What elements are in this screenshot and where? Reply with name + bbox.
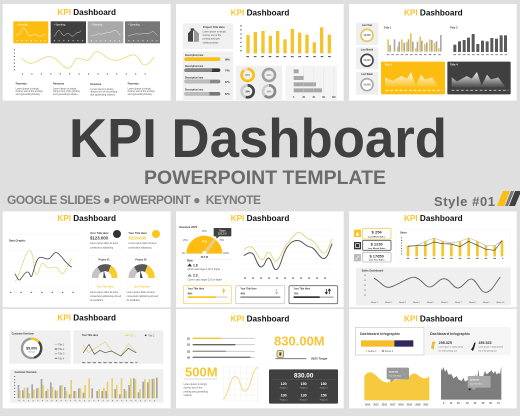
slide title: KPI Dashboard (57, 313, 116, 323)
grey area chart: 70 (497, 403, 500, 405)
slide: sparkline overview (3, 4, 171, 101)
sales dashboard panel: Week 4 (413, 302, 421, 304)
yellow area chart: 2015 (373, 404, 379, 406)
project card: setting industry. (203, 41, 219, 44)
line chart (14, 49, 154, 74)
secondary value: printing and typesetting (184, 390, 208, 393)
revenue gauge: 0% (182, 253, 185, 255)
dark values panel: 150 (301, 382, 307, 386)
sales tiles: $ 254 (372, 230, 382, 235)
yellow area chart: $4,500.000 (389, 370, 398, 373)
bar chart (241, 25, 331, 57)
progress panel: Description here (185, 76, 204, 79)
grey area chart: Your Title Here (470, 383, 482, 386)
gauge card: project 01: Project 01 (98, 258, 110, 261)
sales dashboard panel: Week 6 (441, 302, 449, 304)
project card: Project Title Here (203, 25, 225, 29)
period cards: 10,000 (363, 84, 371, 86)
progress panel: Description here (185, 54, 204, 57)
dark values panel: Product 5 (300, 398, 308, 401)
revenue gauge: Revenue 2025 (179, 225, 198, 229)
progress lines: Q1 (187, 338, 191, 340)
panel: title 4 (447, 62, 511, 94)
donut panel: 36% (267, 91, 271, 93)
gauge card: project 02: Your Title Here (133, 285, 151, 288)
main heading: KPI Dashboard (69, 107, 447, 169)
donut panel (236, 66, 282, 100)
status card: down (236, 286, 285, 304)
secondary value: industry. (184, 394, 193, 397)
sales tiles: $ 17650 (369, 253, 385, 258)
dark values panel: 830.00 (294, 372, 314, 379)
revenue text blocks: Revenue (16, 81, 27, 85)
slide title: KPI Dashboard (404, 314, 463, 324)
gauge card: project 01: Lorem ipsum dolor sit amet (90, 291, 118, 294)
sales dashboard panel: Week 5 (427, 302, 435, 304)
revenue text blocks: Revenue (128, 81, 139, 85)
sales dashboard panel: Week 1 (371, 302, 378, 304)
gauge card: project 01: Your Title Here (97, 285, 114, 288)
stats panel: 159.523 (478, 341, 492, 345)
status card: both: 70% (294, 293, 299, 295)
gauge card: project 01 (88, 255, 122, 303)
icon: style stripes (497, 191, 520, 206)
yellow area chart: 2014 (365, 403, 371, 406)
revenue text blocks: dummy text of the printing (90, 91, 118, 94)
revenue gauge: 75% (219, 240, 224, 242)
dark values panel: Product 6 (320, 398, 328, 401)
ratio block: Ratio (187, 259, 193, 262)
ratio block: 1.8 (193, 263, 198, 267)
progress lines: Q3 (187, 351, 191, 353)
period cards: 10,000 (363, 60, 371, 62)
sales tiles: Last Month Sales (368, 247, 386, 250)
status card: both: Your Title Here (294, 288, 311, 291)
grey area chart (441, 366, 502, 405)
project card: dummy text of the (203, 34, 222, 37)
project card: printing and type (203, 38, 221, 41)
subheading: POWERPOINT TEMPLATE (144, 168, 386, 189)
gauge card: project 02: consectetur adipiscing elit sed (127, 295, 158, 298)
gauge card: project 01: consectetur adipiscing elit sed (90, 295, 122, 298)
gauge card: project 02: Lorem ipsum dolor sit amet (127, 291, 155, 294)
slide: project progress (176, 4, 344, 101)
revenue gauge: 25% (183, 240, 188, 242)
horizontal bars: 0 (293, 97, 295, 99)
secondary value: dummy text of the (184, 387, 203, 390)
progress panel: 67% (225, 94, 231, 96)
dark values panel: Product 2 (300, 387, 308, 390)
line chart panel: Your Title Here (82, 334, 99, 337)
stacked bar card: Dashboard Infographic (360, 332, 400, 336)
progress panel: Description here (185, 65, 204, 68)
period cards: Last Week (361, 73, 373, 76)
progress panel: 98% (225, 60, 231, 62)
customer overview donut panel: Title 2 (58, 348, 65, 351)
chart: title 2 (450, 25, 507, 55)
line chart panel (73, 330, 163, 364)
slide title: KPI Dashboard (231, 314, 289, 324)
stacked bar card: Series 2 (385, 350, 394, 353)
horizontal bars (285, 66, 337, 100)
project card (183, 23, 233, 49)
revenue text blocks: and typesetting industry. (128, 93, 153, 96)
sparkline cards: • Spending (17, 25, 29, 27)
period cards: 10,000 (363, 35, 371, 37)
slide title: KPI Dashboard (404, 213, 463, 223)
ratio block (183, 259, 231, 281)
line chart panel: Title 2 (148, 334, 155, 337)
stats panel: 295.325 (439, 341, 452, 345)
revenue text blocks: dummy text of the printing (16, 90, 43, 93)
horizontal bars: 20 (302, 97, 306, 99)
progress panel: Description here (185, 89, 204, 92)
dark values panel: Product 3 (320, 387, 328, 390)
target marker: 2025 Target (311, 356, 327, 360)
dark values panel: 150 (321, 393, 327, 397)
dark values panel: 120 (281, 382, 287, 386)
slide title: KPI Dashboard (57, 7, 116, 17)
dark values panel: Product 1 (280, 387, 288, 390)
stats panel (424, 327, 511, 355)
chart: title 2: Title 2 (450, 25, 458, 29)
slide: sales (349, 211, 517, 307)
sales tiles: Last Week Sales (368, 235, 386, 238)
revenue gauge: $23.5 M (218, 234, 227, 236)
data graphic chart (9, 235, 83, 292)
big value: 830.00M (274, 333, 325, 348)
line chart panel: Title 1 (130, 334, 137, 337)
horizontal bars: 100 (332, 97, 336, 99)
grey area chart: 50 (482, 403, 485, 405)
platform list: GOOGLE SLIDES ● POWERPOINT ● KEYNOTE (7, 193, 261, 207)
yellow area chart: 2019 (407, 404, 413, 406)
sales dashboard panel: Week 2 (385, 302, 392, 304)
donut panel: 85% (245, 75, 250, 77)
status card: both (289, 286, 338, 304)
grey area chart: 60 (489, 403, 493, 405)
sales tiles (354, 228, 391, 262)
sparkline cards: • Spending (128, 25, 140, 27)
panel: title 4: Title 4 (450, 62, 458, 66)
ratio block: Quick ratio target 1.00 or higher (188, 268, 221, 271)
horizontal bars: 60 (322, 97, 326, 99)
kpi: value one: Lorem ipsum dolor sit amet (90, 242, 118, 245)
kpi: value two: consectetur adipiscing (128, 247, 152, 250)
sparkline cards: • Spending (54, 25, 66, 27)
kpi: value one: consectetur adipiscing (90, 247, 114, 250)
gauge card: project 02 (126, 255, 158, 303)
progress panel: 74% (225, 70, 231, 73)
gauge card: project 01: do incididunt (90, 299, 103, 302)
stats panel: text of the printing and (439, 350, 457, 353)
secondary value: Lorem Ipsum is simply (184, 383, 208, 386)
customer overview donut panel: Title 1 (58, 343, 65, 346)
secondary value: 500M (185, 365, 218, 380)
customer overview donut panel (9, 330, 71, 364)
stats panel: Dashboard Infographic (430, 332, 470, 336)
stats panel: text of the printing and (478, 350, 496, 353)
yellow area chart: Your Title Here (389, 374, 401, 377)
stacked bar card (355, 327, 424, 355)
grid curve chart (224, 367, 258, 400)
yellow area chart: 2017 (390, 404, 396, 406)
slide title: KPI Dashboard (404, 8, 463, 18)
grey area chart: 40 (474, 402, 477, 405)
sales dashboard panel: Week 10 (496, 302, 505, 304)
stacked bar card: Series 1 (368, 350, 377, 353)
yellow area chart: 2020 (415, 404, 421, 406)
revenue text blocks: dummy text of the printing (53, 90, 80, 93)
revenue gauge: 23.5 M (201, 257, 208, 259)
sales dashboard panel: Week 7 (455, 302, 462, 304)
sales dashboard panel: Week 8 (469, 302, 477, 304)
revenue text blocks: Revenue (90, 82, 102, 86)
sparkline cards (13, 21, 160, 43)
revenue text blocks: Lorem Ipsum is simply (16, 87, 40, 90)
slide: customer overview (3, 309, 171, 408)
progress panel (183, 52, 233, 100)
target marker (275, 351, 327, 360)
sales dashboard panel (356, 267, 511, 305)
kpi: value two: Lorem ipsum dolor sit amet (128, 242, 157, 245)
revenue gauge: 50% (202, 231, 207, 233)
data graphic chart: Data Graphic (9, 238, 26, 242)
revenue text blocks (16, 81, 155, 97)
sales dashboard panel: Week 9 (483, 302, 491, 304)
project card: Lorem Ipsum is simply (203, 30, 227, 33)
revenue gauge: 70% (202, 241, 208, 243)
stats panel: Lorem Ipsum is simply dummy (439, 347, 463, 349)
kpi: value one (90, 230, 121, 250)
ratio block: Current ratio target 2.00 or higher (188, 278, 222, 281)
slide: 830.00M target (176, 309, 344, 408)
grey area chart: $4,500.000 (470, 379, 479, 382)
customer overview donut panel: Title 3 (58, 353, 65, 356)
ratio block: 2.3 (193, 274, 198, 278)
customer overview donut panel: Title 4 (58, 357, 65, 360)
status card: up (183, 286, 231, 304)
gauge card: project 02: do incididunt (127, 299, 140, 302)
revenue text blocks: Lorem Ipsum is simply (128, 87, 152, 90)
progress lines: Q4 (187, 356, 191, 359)
yellow area chart (364, 368, 429, 406)
sales chart (396, 230, 511, 261)
donut panel: 28% (245, 91, 251, 93)
grey area chart: 0 (443, 403, 445, 405)
period cards: Last Month (361, 48, 374, 51)
dark values panel (269, 369, 338, 404)
slide: data graphic (3, 211, 171, 307)
customer overview donut panel: $5,000 (26, 346, 37, 350)
secondary value (184, 365, 218, 397)
revenue text blocks: and typesetting industry. (53, 93, 78, 96)
sales chart: Sales (400, 231, 407, 235)
style label: Style #01 (434, 194, 495, 209)
kpi: value two: $234.000 (128, 235, 147, 240)
status card: down: 40% (240, 292, 246, 295)
kpi: value one: Your Title Here (90, 231, 109, 235)
dark values panel: 100 (281, 393, 287, 397)
dual line chart (241, 230, 334, 278)
grey area chart: 10 (450, 403, 453, 405)
customer overview bar panel: Customer Overview (15, 371, 37, 374)
sales dashboard panel: Week 3 (399, 302, 407, 304)
slide title: KPI Dashboard (231, 213, 289, 223)
progress lines (187, 338, 255, 359)
revenue gauge (179, 225, 231, 259)
dark values panel: 130 (301, 393, 307, 397)
dark values panel: Product 4 (280, 398, 288, 401)
status card: down: Your Title Here (240, 288, 257, 291)
revenue text blocks: Lorem Ipsum is simply (90, 88, 114, 91)
slide: revenue gauge (176, 211, 344, 307)
sales dashboard panel: Sales Dashboard (362, 269, 384, 273)
grey area chart: 30 (466, 403, 469, 405)
panel: title 3 (381, 62, 445, 94)
customer overview bar panel (10, 369, 163, 403)
dark values panel: 180 (321, 382, 327, 386)
status card: up: Your Title Here (188, 288, 205, 291)
gauge card: project 02: Project 02 (135, 258, 147, 261)
kpi: value two: Your Title Here (128, 231, 148, 235)
customer overview donut panel: Overview (28, 352, 36, 354)
stats panel: Lorem Ipsum is simply dummy (478, 347, 503, 349)
revenue gauge: 100% (223, 253, 229, 255)
sales tiles: $ 1230 (371, 241, 384, 246)
progress lines: Q2 (187, 345, 191, 347)
grey area chart: 20 (457, 403, 460, 405)
revenue text blocks: Lorem Ipsum is simply (53, 87, 77, 90)
sales tiles: Last Year Sales (369, 259, 385, 262)
revenue text blocks: and typesetting industry. (16, 93, 41, 96)
customer overview donut panel: Customer Overview (12, 332, 34, 335)
period cards: Last Year (362, 24, 372, 27)
revenue text blocks: dummy text of the printing (128, 90, 155, 93)
slide title: KPI Dashboard (231, 8, 289, 18)
slide: dashboard infographic (349, 309, 517, 408)
yellow area chart: 2021 (423, 404, 429, 406)
yellow area chart: 2016 (382, 404, 388, 406)
revenue text blocks: and typesetting industry. (90, 94, 116, 97)
sparkline cards: • Spending (91, 25, 103, 27)
slide title: KPI Dashboard (57, 213, 116, 223)
chart: title 1: Title 1 (384, 25, 392, 29)
revenue gauge: Target (219, 229, 226, 232)
yellow area chart: 2018 (398, 404, 404, 406)
kpi: value one: $123.000 (90, 235, 109, 240)
period cards (356, 23, 378, 95)
panel: title 3: Title 3 (384, 62, 392, 66)
horizontal bars: 40 (312, 96, 316, 99)
status card: up: 80% (188, 293, 193, 295)
kpi: value two (128, 230, 160, 250)
progress panel: 67% (225, 82, 231, 84)
chart: title 1 (384, 25, 442, 55)
slide: periods and titles (349, 4, 517, 101)
donut panel: 61% (267, 75, 271, 77)
revenue text blocks: Revenue (53, 81, 65, 85)
